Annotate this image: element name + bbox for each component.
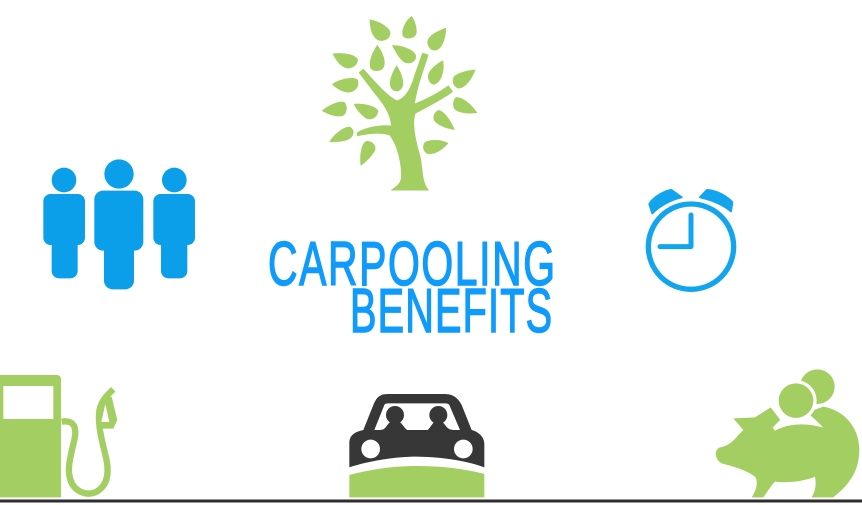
icon: gas pump: [0, 375, 117, 497]
title: BENEFITS: [350, 277, 553, 346]
icon: piggy bank: [716, 369, 859, 497]
title: CARPOOLING: [268, 230, 557, 299]
icon: tree: [323, 17, 477, 190]
icon: three people: [43, 159, 195, 289]
title: [268, 230, 557, 346]
car body: [349, 394, 484, 467]
icon: car with passengers: [349, 394, 484, 497]
ground line: [0, 500, 862, 502]
icon: alarm clock: [648, 190, 734, 289]
